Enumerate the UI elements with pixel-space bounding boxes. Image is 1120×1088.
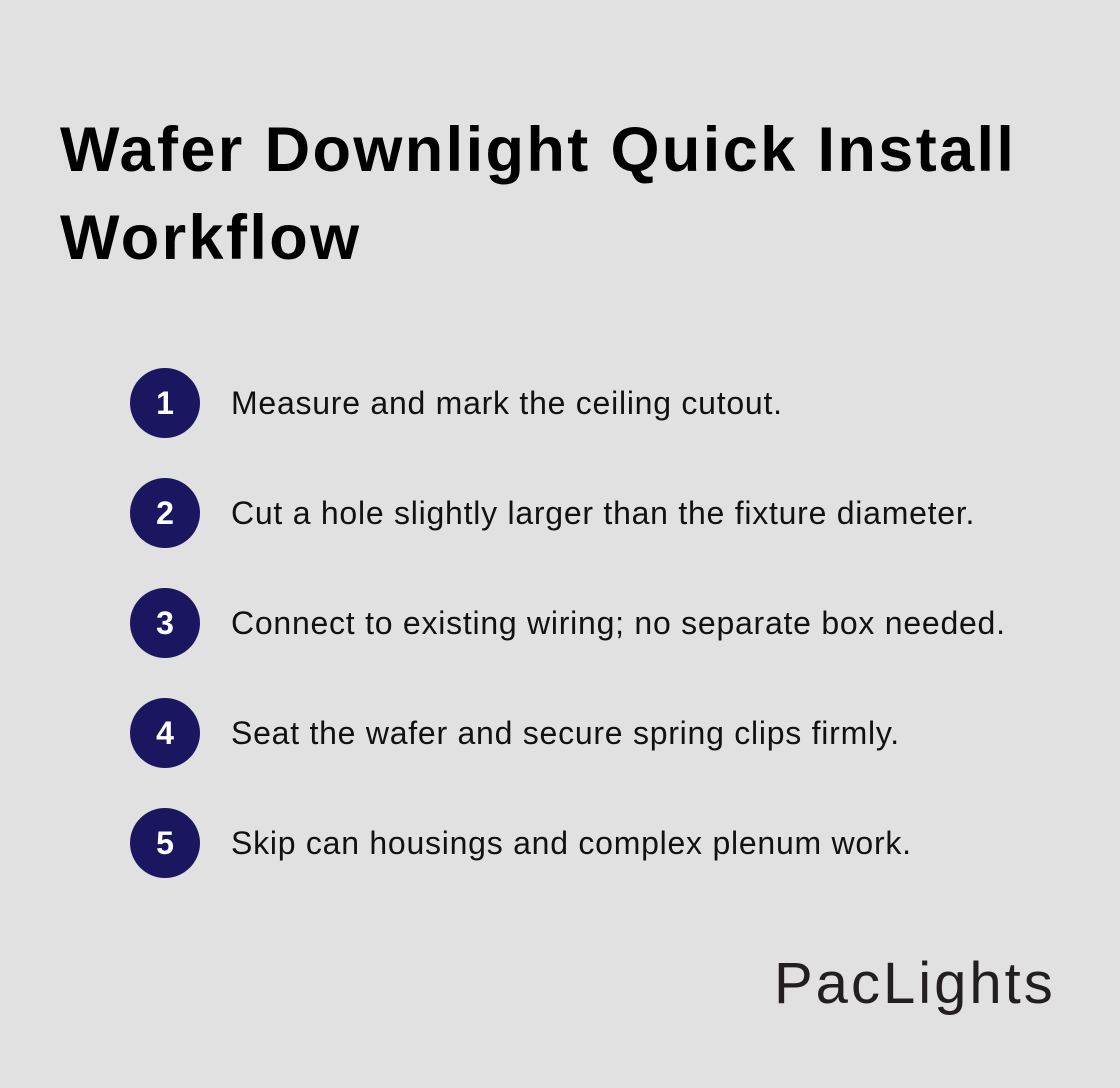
step 1: 1: [156, 385, 174, 421]
title: Wafer Downlight Quick Install: [60, 115, 1016, 185]
logo: PacLights: [774, 951, 1056, 1016]
step 3: 3: [156, 605, 174, 641]
step 4: [130, 698, 900, 768]
step 5: [130, 808, 912, 878]
step 2: Cut a hole slightly larger than the fixture diameter.: [231, 495, 975, 531]
step 3: Connect to existing wiring; no separate box needed.: [231, 605, 1006, 641]
step 4: Seat the wafer and secure spring clips firmly.: [231, 715, 900, 751]
step 1: Measure and mark the ceiling cutout.: [231, 385, 783, 421]
step 5: Skip can housings and complex plenum work.: [231, 825, 912, 861]
step 1: [130, 368, 783, 438]
title: Workflow: [60, 203, 362, 273]
step 2: 2: [156, 495, 174, 531]
step 2: [130, 478, 975, 548]
step 5: 5: [156, 825, 174, 861]
step 4: 4: [156, 715, 174, 751]
title: [60, 115, 1016, 273]
step 3: [130, 588, 1006, 658]
